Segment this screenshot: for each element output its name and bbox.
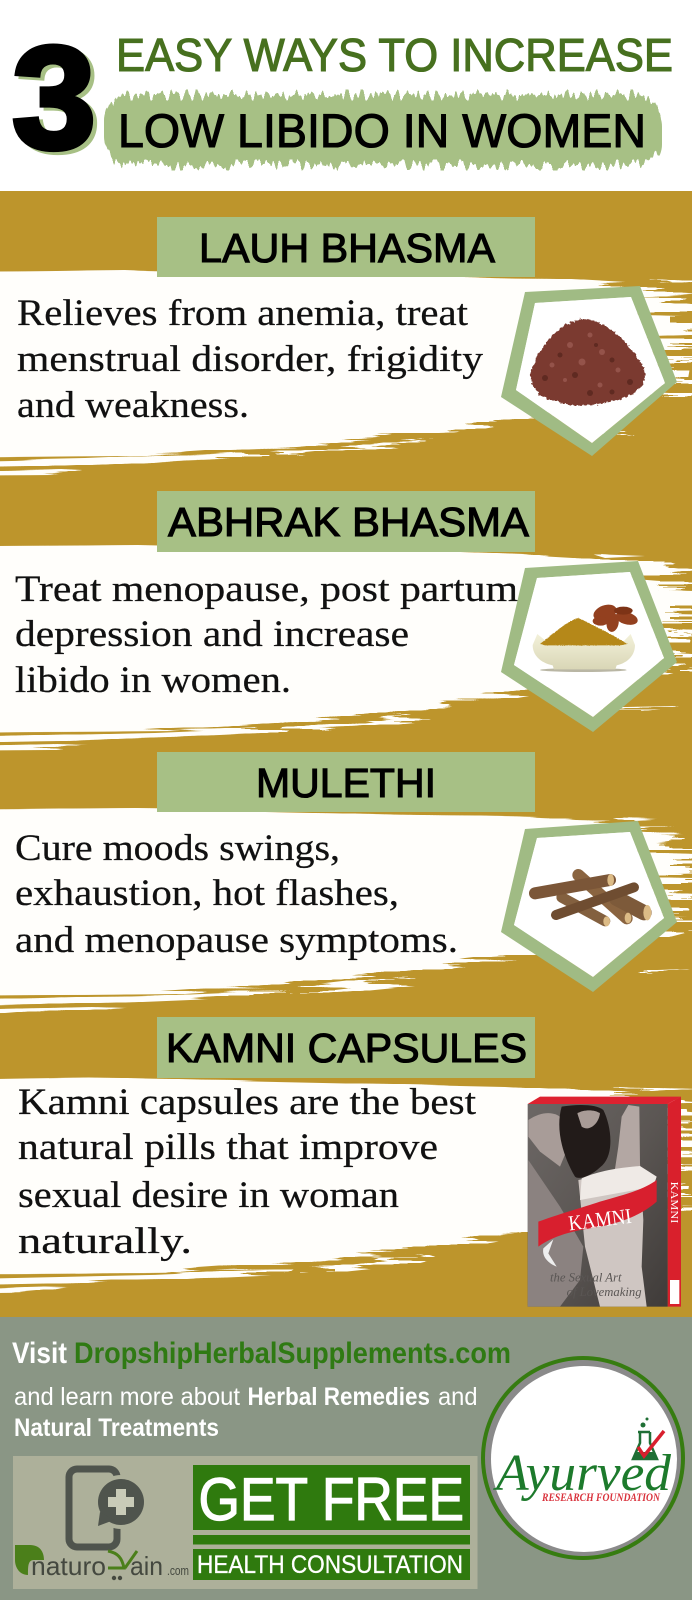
consultation banner <box>13 1456 478 1589</box>
description text: and menopause symptoms. <box>15 920 458 961</box>
description text: libido in women. <box>15 660 291 701</box>
description text: naturally. <box>18 1221 192 1262</box>
product box: Kamni: of Lovemaking <box>567 1285 642 1299</box>
description text: Treat menopause, post partum <box>15 569 518 610</box>
heading box <box>157 217 535 277</box>
get free button: GET FREE <box>198 1466 464 1533</box>
description text: menstrual disorder, frigidity <box>17 339 484 380</box>
gold background panel <box>0 191 692 1318</box>
logo: Ayurved Research Foundation: Ayurved <box>493 1445 672 1502</box>
heading box: ABHRAK BHASMA <box>168 499 530 545</box>
heading box <box>157 752 535 812</box>
panel: Mulethi <box>15 752 677 992</box>
green brush highlight <box>104 95 662 165</box>
description text: and weakness. <box>17 385 249 426</box>
logo: Ayurved Research Foundation <box>481 1356 685 1560</box>
header <box>12 16 673 182</box>
description text: Cure moods swings, <box>15 828 340 869</box>
pentagon frame <box>501 286 677 456</box>
learn more text: and learn more about <box>14 1383 240 1411</box>
description text: Kamni capsules are the best <box>18 1082 477 1123</box>
draped figure, tonal shapes <box>528 1113 568 1167</box>
logo: naturogain: naturo <box>31 1551 106 1581</box>
heading line 2: LOW LIBIDO IN WOMEN <box>118 104 646 157</box>
learn more text: and <box>438 1383 478 1411</box>
description text: exhaustion, hot flashes, <box>15 873 399 914</box>
visit line: DropshipHerbalSupplements.com <box>74 1337 511 1370</box>
product box: Kamni: the Sexual Art <box>550 1271 622 1285</box>
panel: Lauh Bhasma <box>17 217 677 456</box>
red ribbon with product name <box>538 1180 657 1247</box>
description text <box>15 569 518 701</box>
logo: naturogain: ain <box>130 1551 163 1581</box>
heading box: MULETHI <box>256 760 436 806</box>
description text: sexual desire in woman <box>18 1175 399 1216</box>
icon: licorice sticks <box>535 874 651 926</box>
learn more text <box>14 1383 478 1442</box>
pentagon frame <box>501 821 677 992</box>
icon: red-brown powder pile <box>531 319 645 405</box>
icon: flask with check mark <box>633 1418 664 1459</box>
white brush strips <box>0 270 692 1294</box>
description text <box>15 828 458 961</box>
icon: bowl of herbal powder and dates <box>533 602 639 672</box>
logo: naturogain <box>15 1545 189 1581</box>
product box: Kamni <box>528 1097 681 1307</box>
icon: phone with medical bubble <box>69 1469 148 1547</box>
product box: Kamni: KAMNI <box>567 1204 633 1235</box>
numeral 3 with shadow: 3 <box>12 16 96 179</box>
learn more text: Herbal Remedies <box>248 1383 430 1411</box>
product box: Kamni: KAMNI <box>668 1182 679 1224</box>
logo: Ayurved Research Foundation: RESEARCH FOUNDATION <box>541 1490 661 1504</box>
learn more text: Natural Treatments <box>14 1414 219 1442</box>
heading box: KAMNI CAPSULES <box>166 1025 527 1071</box>
panel: Kamni Capsules <box>18 1017 681 1307</box>
health consultation button: HEALTH CONSULTATION <box>197 1551 463 1579</box>
heading line 1: EASY WAYS TO INCREASE <box>116 29 673 81</box>
visit line: Visit <box>12 1337 67 1370</box>
pentagon frame <box>501 561 677 732</box>
description text: Relieves from anemia, treat <box>17 293 469 334</box>
logo: naturogain: .com <box>167 1563 189 1578</box>
heading box: LAUH BHASMA <box>199 225 496 271</box>
description text <box>17 293 484 426</box>
description text: natural pills that improve <box>18 1127 438 1168</box>
description text <box>18 1082 477 1262</box>
description text: depression and increase <box>15 614 409 655</box>
footer panel <box>0 1317 692 1600</box>
numeral 3 with shadow: 3 <box>16 19 100 182</box>
panel: Abhrak Bhasma <box>15 491 677 732</box>
